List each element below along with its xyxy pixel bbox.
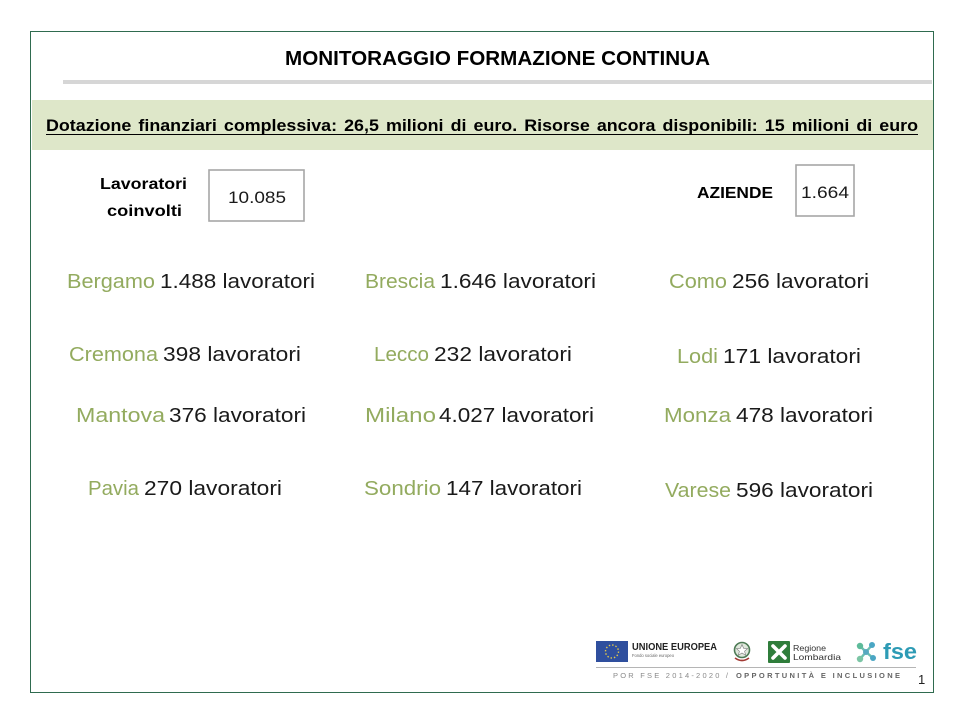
EU label: Fondo sociale europeo [632,653,674,658]
province: Bergamo [67,271,315,293]
province: Brescia: Brescia [365,271,436,293]
funding banner: Dotazione finanziari complessiva: 26,5 milioni di euro. Risorse ancora disponibili: 15 milioni di euro [46,116,918,135]
province: Varese: 596 lavoratori [736,480,873,502]
province: Lecco: Lecco [374,344,429,366]
province: Cremona [69,344,301,366]
province: Monza [664,405,873,427]
province: Brescia: 1.646 lavoratori [440,271,596,293]
province: Sondrio: 147 lavoratori [446,478,582,500]
province: Como: Como [669,271,727,293]
province: Como [669,271,869,293]
companies label: AZIENDE [697,185,773,202]
workers label: Lavoratori [100,176,187,193]
province: Milano: 4.027 lavoratori [439,405,594,427]
icon: Regione Lombardia: Lombardia [793,652,841,662]
footer programme line [613,671,900,680]
province: Mantova [76,405,306,427]
page number: 1 [918,672,925,687]
province: Bergamo: 1.488 lavoratori [160,271,315,293]
footer divider [596,667,916,668]
province: Lodi: 171 lavoratori [723,346,861,368]
funding banner [32,100,933,150]
province: Monza: Monza [664,405,732,427]
title underline [63,80,932,84]
province: Pavia: Pavia [88,478,140,500]
province: Lecco: 232 lavoratori [434,344,572,366]
province: Cremona: 398 lavoratori [163,344,301,366]
workers value box [209,170,304,221]
province: Lecco [374,344,572,366]
icon: FSE [857,639,917,664]
province: Cremona: Cremona [69,344,159,366]
workers label: coinvolti [107,203,182,220]
province: Pavia: 270 lavoratori [144,478,282,500]
province: Sondrio [364,478,582,500]
icon: Italian emblem [734,642,750,660]
companies value box [796,165,854,216]
province: Mantova: Mantova [76,405,166,427]
workers value box: 10.085 [228,188,286,207]
province: Lodi [677,346,861,368]
province: Mantova: 376 lavoratori [169,405,306,427]
footer programme line: OPPORTUNITÀ E INCLUSIONE [736,671,900,680]
icon: EU flag [596,641,628,662]
province: Brescia [365,271,596,293]
title: MONITORAGGIO FORMAZIONE CONTINUA [285,48,710,70]
province: Sondrio: Sondrio [364,478,441,500]
companies value box: 1.664 [801,183,849,202]
province: Como: 256 lavoratori [732,271,869,293]
icon: FSE: fse [883,639,917,664]
province: Lodi: Lodi [677,346,718,368]
icon: Regione Lombardia [768,641,841,663]
province: Pavia [88,478,282,500]
province: Milano: Milano [365,405,436,427]
province: Varese [665,480,873,502]
workers label [100,176,187,220]
icon: Regione Lombardia: Regione [793,643,826,653]
EU label [632,642,717,658]
province: Varese: Varese [665,480,731,502]
footer logos [596,639,917,664]
footer programme line: POR FSE 2014-2020 / [613,671,729,680]
EU label: UNIONE EUROPEA [632,642,717,653]
province: Milano [365,405,594,427]
province: Monza: 478 lavoratori [736,405,873,427]
province: Bergamo: Bergamo [67,271,155,293]
